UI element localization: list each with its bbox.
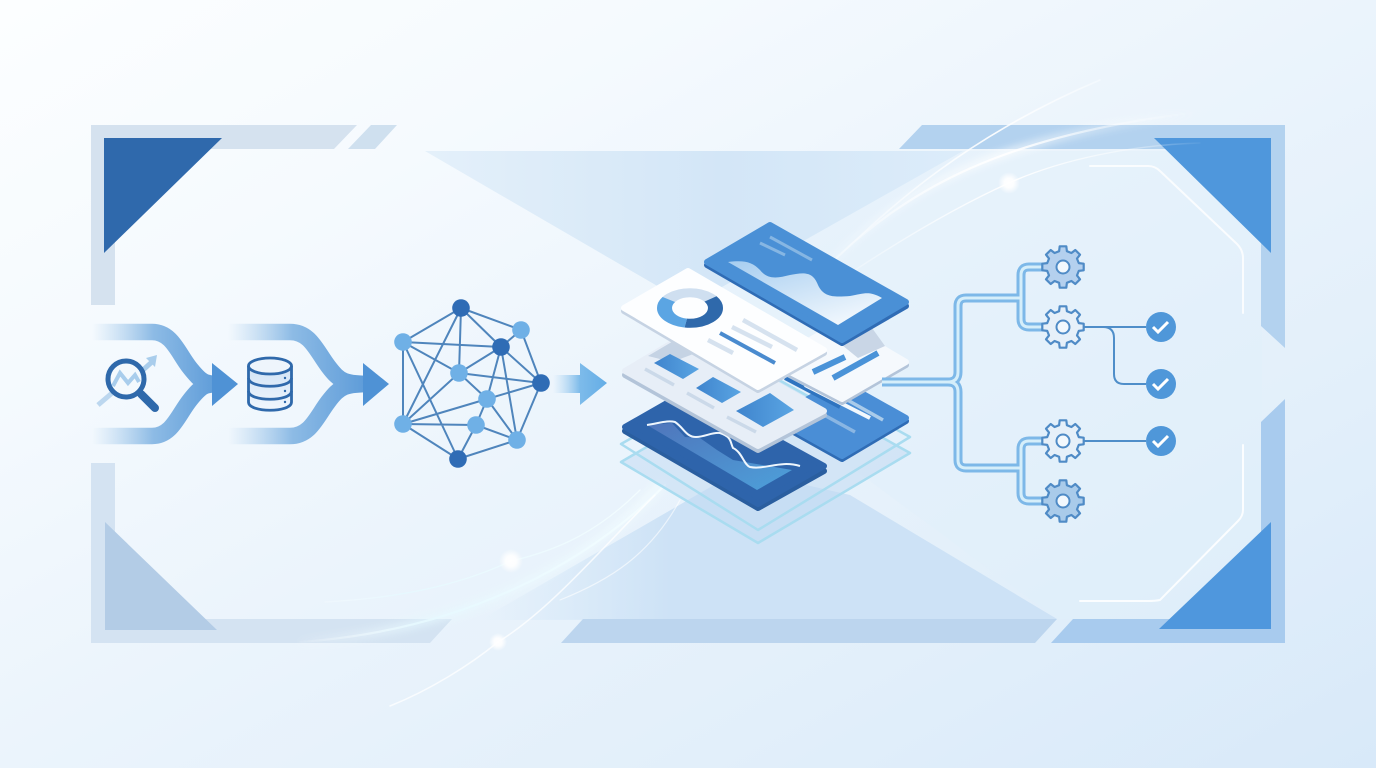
arrow: network to layers [553,363,607,405]
layer: top blue area chart panel [707,225,906,343]
frame: bottom-right corner [1051,399,1285,643]
layer: dark chart panel [625,391,824,508]
corner triangle: top-left [104,138,222,253]
flow arrow: second chevron [228,332,389,436]
icon: check 3 [1146,426,1176,456]
icon: check 2 [1146,369,1176,399]
layer: pale base outlines [621,360,910,543]
network edges [403,308,541,459]
icon: gear 2 [1042,306,1084,348]
corner triangle: bottom-left [105,522,217,630]
icon: gear 4 [1042,480,1084,522]
decision tree connectors [882,267,1046,501]
layer: grey tile panel [625,333,824,450]
frame: bottom centre bar [561,619,1057,643]
corner triangle: top-right [1154,138,1271,253]
icon: magnifier with trend [98,355,157,408]
layer: lower right blue panel [774,378,906,459]
inner white frame lines [1080,166,1243,601]
light streaks: top right [830,80,1200,280]
network nodes [449,299,550,468]
icon: check 1 [1146,312,1176,342]
network graph [394,299,550,468]
layered dashboard stack [621,225,910,543]
thin connectors to checks [1084,327,1146,441]
layer: right white bar panel [771,323,906,402]
glow dots [489,172,1020,651]
light streaks: bottom [300,485,680,706]
icon: gear 3 [1042,420,1084,462]
icon: gear 1 [1042,246,1084,288]
donut chart [664,293,716,323]
layer: white donut report panel [624,271,824,390]
corner triangle: bottom-right [1159,522,1271,629]
icon: database [248,358,292,410]
frame: bottom-left corner [91,463,452,643]
flow arrow: first chevron [92,332,238,436]
central bowtie backdrop [425,151,1262,620]
frame: top-left corner [91,125,397,305]
frame: top-right corner [899,125,1285,348]
